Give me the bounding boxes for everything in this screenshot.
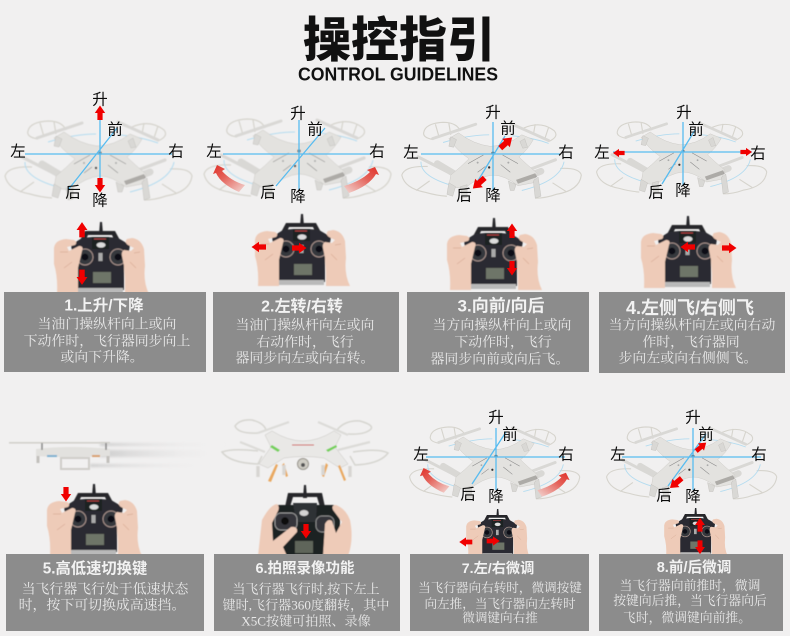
step 7 text panel: 微调键向右推 <box>462 610 538 625</box>
panel 4 illustration: 前 <box>688 120 704 138</box>
step 3 text panel: 器同步向前或向后飞。 <box>431 350 569 368</box>
panel 1 illustration: 降 <box>92 192 108 210</box>
panel 8 illustration: 前 <box>698 426 714 444</box>
step 8 text panel <box>599 554 783 631</box>
step 5 text panel: 当飞行器飞行处于低速状态 <box>22 580 189 598</box>
step 6 text panel: X5C按键可拍照、录像 <box>241 612 371 628</box>
panel 7 illustration: 右 <box>558 446 574 464</box>
panel 2 illustration: 右 <box>369 142 385 160</box>
panel 1 illustration: 升 <box>92 90 108 108</box>
panel 2 illustration: 后 <box>260 184 276 202</box>
panel 4 illustration: 降 <box>675 182 691 200</box>
step 8 text panel: 飞时，微调键向前推。 <box>623 610 751 626</box>
step 4 text panel: 步向左或向右侧侧飞。 <box>619 350 757 366</box>
panel 8 illustration: 升 <box>685 408 701 426</box>
panel 4 illustration: 左 <box>594 144 610 162</box>
step 2 text panel: 器同步向左或向右转。 <box>236 350 374 366</box>
step 1 text panel <box>4 292 206 372</box>
step 6 text panel: 6.拍照录像功能 <box>255 559 355 577</box>
panel 8 illustration: 右 <box>751 446 767 464</box>
panel 7 illustration: 左 <box>413 446 429 464</box>
step 7 text panel: 7.左/右微调 <box>462 560 534 577</box>
panel 1 illustration: 后 <box>65 184 81 202</box>
panel 2 illustration: 降 <box>290 188 306 206</box>
step 8 text panel: 当飞行器向前推时，微调 <box>620 578 761 594</box>
panel 1 illustration <box>5 90 192 294</box>
step 1 text panel: 当油门操纵杆向上或向 <box>38 316 177 332</box>
panel 4 illustration <box>594 104 767 288</box>
step 3 text panel: 3.向前/向后 <box>458 296 544 316</box>
step 2 text panel: 当油门操纵杆向左或向 <box>236 316 375 334</box>
panel 8 illustration <box>607 408 777 556</box>
step 4 text panel <box>599 292 785 373</box>
panel 8 illustration: 后 <box>656 486 672 504</box>
step 5 text panel <box>6 554 204 631</box>
step 3 text panel: 当方向操纵杆向上或向 <box>433 316 572 334</box>
panel 5 illustration: side view drone <box>9 442 225 556</box>
panel 2 illustration: 升 <box>290 104 306 122</box>
step 1 text panel: 下动作时，飞行器同步向上 <box>24 332 190 350</box>
panel 8 illustration: 左 <box>610 446 626 464</box>
panel 3 illustration: 右 <box>558 144 574 162</box>
panel 7 illustration <box>410 408 580 557</box>
step 8 text panel: 按键向后推，当飞行器向后 <box>613 593 767 609</box>
step 7 text panel <box>410 554 589 631</box>
panel 4 illustration: 后 <box>648 184 664 202</box>
step 6 text panel: 键时,飞行器360度翻转，其中 <box>223 596 389 614</box>
panel 8 illustration: 降 <box>685 488 701 506</box>
panel 3 illustration <box>402 104 581 290</box>
panel 2 illustration <box>204 104 391 286</box>
panel 2 illustration: 左 <box>206 142 222 160</box>
panel 1 illustration: 前 <box>107 120 123 138</box>
step 2 text panel: 右动作时，飞行 <box>256 334 354 350</box>
step 1 text panel: 或向下升降。 <box>60 350 144 366</box>
panel 7 illustration: 前 <box>502 426 518 444</box>
step 2 text panel: 2.左转/右转 <box>261 298 343 316</box>
step 5 text panel: 5.高低速切换键 <box>43 560 147 578</box>
step 3 text panel <box>407 292 589 372</box>
step 1 text panel: 1.上升/下降 <box>64 296 144 314</box>
panel 4 illustration: 升 <box>676 104 692 122</box>
step 4 text panel: 4.左侧飞/右侧飞 <box>626 298 754 318</box>
step 7 text panel: 向左推，当飞行器向左转时 <box>424 596 576 612</box>
panel 3 illustration: 前 <box>500 120 516 138</box>
panel 4 illustration: 右 <box>750 144 766 162</box>
panel 7 illustration: 升 <box>488 408 504 426</box>
controller with thumbs on sticks <box>258 485 352 556</box>
panel 2 illustration: 前 <box>307 120 323 138</box>
step 6 text panel: 当飞行器飞行时,按下左上 <box>232 580 380 596</box>
panel 1 illustration: 右 <box>168 142 184 160</box>
panel 1 illustration: 左 <box>10 142 26 160</box>
step 7 text panel: 当飞行器向右转时，微调按键 <box>418 580 582 596</box>
panel 7 illustration: 降 <box>488 488 504 506</box>
step 4 text panel: 作时，飞行器同 <box>642 334 740 350</box>
panel 7 illustration: 后 <box>460 486 476 504</box>
step 4 text panel: 当方向操纵杆向左或向右动 <box>609 316 775 334</box>
step 5 text panel: 时，按下可切换成高速挡。 <box>19 596 185 614</box>
panel 3 illustration: 升 <box>485 104 501 122</box>
step 2 text panel <box>213 292 399 372</box>
step 6 text panel <box>214 554 400 631</box>
title: 操控指引 <box>303 14 495 68</box>
panel 3 illustration: 降 <box>485 186 501 204</box>
subtitle: CONTROL GUIDELINES <box>298 64 498 84</box>
panel 6 illustration: front view drone <box>222 420 388 556</box>
step 3 text panel: 下动作时，飞行 <box>454 334 552 350</box>
panel 3 illustration: 后 <box>456 186 472 204</box>
step 8 text panel: 8.前/后微调 <box>657 558 731 576</box>
panel 3 illustration: 左 <box>403 144 419 162</box>
